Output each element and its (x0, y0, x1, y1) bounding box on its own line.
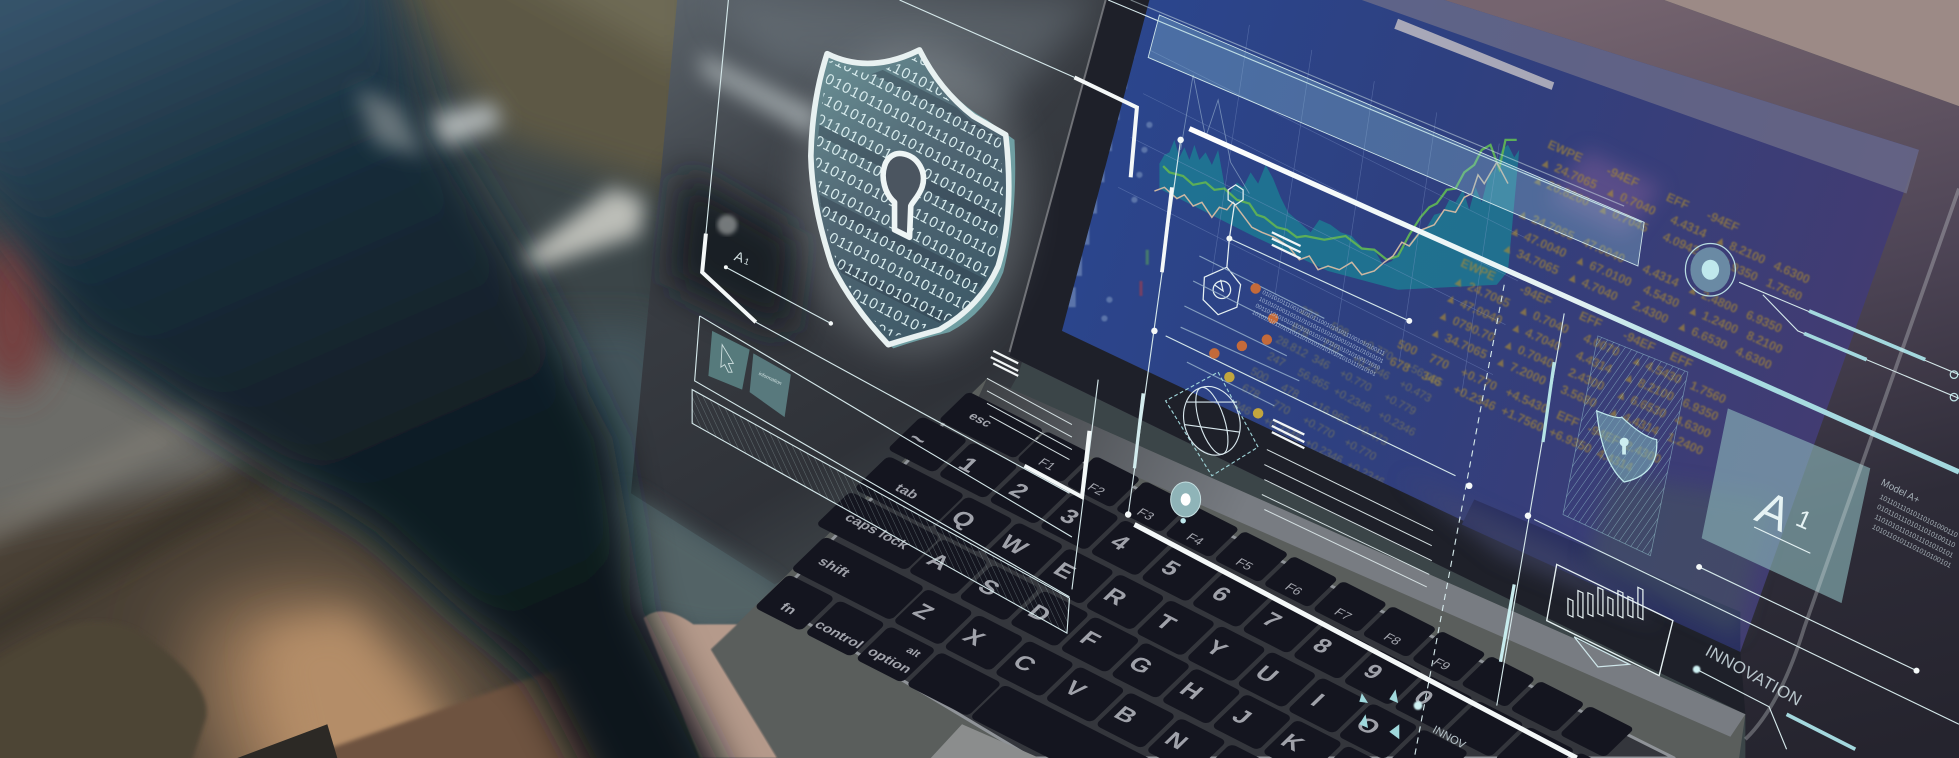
left stacked lines (987, 378, 1433, 587)
A1 card: A (1748, 481, 1800, 543)
market data columns: 678 346 +0.2346 +1.7560 +6.9350 4.4314 (1387, 354, 1635, 475)
keyboard lower letter row: shift (814, 555, 853, 580)
model label and binary readout (1871, 477, 1959, 570)
faded table numbers: 678 770 +0.2346 +0.473 (1289, 321, 1433, 405)
bar chart box (1547, 564, 1673, 676)
binary digits inside the shield: 1011010101010111010101011010110 (734, 205, 997, 350)
faded table numbers: 227 508 +0.770 +56.965 (1298, 304, 1445, 390)
faded table numbers: 28.812 346 +0.770 +0.779 (1274, 334, 1418, 418)
binary digits inside the shield: 1010101101010101011010101010100 (761, 151, 1028, 298)
binary digits inside the shield: 1010110101011010101010110101010 (743, 187, 1008, 334)
market data columns: ▲ 34.7065 ▲ 7.2000 3.5680 ▲ 4.4314 1.2400 (1428, 324, 1706, 458)
A1 card (1702, 408, 1870, 603)
A1 small label (732, 248, 751, 267)
market data columns: ▲ 24.7065 ▲ 0.7040 4.4314 ▲ 8.2100 4.6300 (1538, 154, 1812, 287)
keyboard function row: F8 (1380, 630, 1405, 648)
scanner node on keyboard edge (1171, 482, 1201, 523)
binary digits inside the shield (816, 58, 1003, 336)
hatched panel with small shield (1563, 336, 1688, 556)
blurred hardware highlights (356, 87, 645, 267)
keyboard number row: ~ (902, 427, 933, 452)
binary digits inside the shield: 1010101101010101101011010101010 (706, 258, 972, 405)
market data columns: 500 770 +0.770 +4.5430 EFF -94EF 2.4300 (1395, 337, 1663, 467)
keyboard function row: F6 (1282, 580, 1306, 598)
interface frame lines, thin (692, 0, 1959, 758)
model label and binary readout: 01011011101011010100110 (1876, 504, 1956, 549)
translucent holographic panel (537, 0, 1131, 631)
security shield icon (808, 47, 1016, 348)
keyboard well (772, 402, 1674, 758)
binary digits inside the shield: 1011010101010101101110101010100 (833, 9, 1098, 155)
keyboard lower letter row (791, 536, 1328, 758)
scanner node on upper right (1685, 244, 1735, 296)
glow around the shield (797, 44, 1027, 356)
keyboard number row: 3 (1054, 505, 1085, 529)
laptop lid (1009, 0, 1959, 758)
keyboard number row: 1 (953, 453, 984, 477)
market data columns: ▲ 34.7065 ▲ 4.7040 2.4300 ▲ 6.6530 4.6300 (1500, 240, 1774, 372)
keyboard lower letter row: X (957, 625, 990, 650)
keyboard bottom modifier row (754, 574, 1275, 758)
market data columns: EWPE -94EF EFF -94EF EFF (1459, 256, 1695, 371)
keyboard bottom modifier row: alt (903, 645, 924, 660)
A1 card: 1 (1792, 504, 1816, 536)
faded table numbers (1232, 306, 1444, 483)
hand holding the laptop (643, 611, 777, 758)
faded table numbers: 346 +0.2346 +0.2346 +0.2346 (1231, 399, 1386, 489)
keyboard lower letter row: V (1058, 677, 1092, 702)
keyboard function row: esc (965, 409, 996, 429)
keyboard lower letter row: Z (907, 599, 939, 624)
keyboard home row: K (1275, 730, 1310, 756)
binary data stream under the chart: 01010101110010101011100101010111001010100111 (1261, 290, 1386, 357)
binary data stream under the chart: 10101010011010101010110101010010101101010101 (1258, 297, 1384, 365)
keyboard number row: 7 (1256, 608, 1287, 632)
keyboard lower letter row: C (1007, 650, 1042, 677)
keyboard home row: G (1123, 652, 1158, 679)
keyboard QWERTY row: U (1249, 661, 1284, 688)
trackpad (931, 724, 1039, 758)
teal tile with information text (750, 353, 791, 417)
keyboard home row: H (1174, 678, 1208, 704)
keyboard home row (816, 491, 1394, 758)
model label and binary readout: 10110111010110101000110 (1878, 494, 1959, 539)
screen reflection outline on the right (1745, 189, 1959, 739)
binary digits inside the shield: 1101011010101011101010101101010 (697, 276, 961, 422)
keyhole (883, 153, 923, 237)
keyboard number row: 6 (1206, 582, 1237, 607)
keyboard lower letter row: N (1159, 728, 1193, 754)
model label and binary readout: 11010101101011101010101 (1873, 514, 1954, 560)
keyboard function row: F2 (1084, 481, 1109, 498)
keyboard function row: F7 (1331, 605, 1355, 623)
stock chart (1154, 75, 1519, 290)
model label and binary readout: Model A+ (1879, 477, 1921, 506)
keyboard number row: 8 (1307, 634, 1338, 658)
keyboard home row: F (1074, 627, 1106, 652)
market data columns: EWPE -94EF EFF -94EF (1545, 137, 1742, 235)
faded table numbers: 247 56.965 +0.2346 +0.2346 (1265, 350, 1417, 439)
keyboard number row: 2 (1003, 479, 1034, 503)
keyboard function row: F4 (1183, 531, 1207, 548)
keyboard bottom modifier row: control (811, 618, 866, 652)
arm and watch strap (237, 649, 700, 758)
keyboard function row: F1 (1035, 456, 1059, 473)
market data columns: ▲ 20.8200 ▲ 0.7045 4.0942 ▲ 6.9350 1.7560 (1530, 172, 1805, 304)
keyboard function row: F3 (1134, 506, 1158, 523)
INNOVATION label: INNOVATION (1702, 641, 1805, 710)
screen grid lines (1118, 25, 1524, 393)
faded table numbers: 678 770 +0.770 +0.770 (1240, 382, 1378, 463)
screen side tabs and stock ticks (1068, 37, 1153, 322)
market data columns: ▲ 47.0040 ▲ 67.0100 4.5430 ▲ 1.2400 8.2100 (1507, 223, 1785, 357)
market data columns (1390, 140, 1810, 471)
binary digits inside the shield: 1011010101101010101101010101000 (797, 80, 1063, 227)
keyboard QWERTY row (854, 456, 1469, 758)
binary digits inside the shield: 1101010110101011101010110101010 (806, 62, 1070, 208)
keyboard number row: 4 (1104, 531, 1136, 555)
keyboard bottom modifier row: fn (776, 601, 800, 618)
small triple bars (991, 232, 1304, 448)
teal tile with cursor icon (708, 331, 750, 390)
binary digits inside the shield: 1010101101010101011010101100101 (815, 45, 1081, 191)
keyboard QWERTY row: R (1098, 584, 1132, 610)
globe icon in dashed diamond (1166, 372, 1258, 476)
keyboard QWERTY row: W (994, 531, 1034, 560)
keyboard home row: caps lock (841, 511, 912, 552)
market data columns: ▲ 0790.70 ▲ 0.7040 2.4300 ▲ 6.6530 4.6300 (1436, 307, 1713, 441)
binary digits inside the shield: 1101010101101010101110101010100 (779, 116, 1044, 262)
A1 small label: 1 (743, 256, 751, 267)
laptop screen (1062, 0, 1919, 652)
keyboard bottom modifier row: option (864, 645, 915, 676)
market data columns: ▲ 47.0040 ▲ 4.7040 4.4314 ▲ 8.2100 6.9350 (1443, 290, 1721, 424)
binary digits inside the shield: 1011101010101010111010101101010 (770, 134, 1034, 279)
blurred shoulder in the foreground (0, 0, 743, 758)
faded table numbers: 500 478 +16.965 +0.473 (1248, 366, 1390, 448)
keyboard home row: A (921, 549, 955, 575)
keyboard number row (887, 416, 1626, 758)
small INNOVATION label on keyboard: INNOV (1430, 724, 1468, 752)
thick bracket and accent lines (702, 77, 1959, 758)
binary digits inside the shield: 1010110101010111010101011010100 (788, 98, 1053, 244)
chart marker hexagons (1203, 185, 1243, 315)
keyboard function row (938, 391, 1635, 758)
keyboard home row: S (972, 575, 1005, 600)
A1 small label: A (732, 248, 747, 266)
keyboard QWERTY row: Y (1199, 636, 1233, 661)
keyboard number row: 9 (1357, 660, 1388, 684)
keyboard home row: D (1022, 600, 1057, 627)
glowing nodes (1359, 666, 1700, 739)
slider controls with orange knobs (1181, 256, 1343, 419)
model label and binary readout: 10101101011101010100101 (1871, 524, 1952, 570)
binary data stream under the chart: 00110101010101101010101010110101010100101010 (1254, 303, 1381, 372)
keyboard QWERTY row: T (1149, 610, 1182, 635)
keyboard QWERTY row: E (1048, 558, 1081, 584)
line end dots (724, 137, 1920, 674)
keyboard function row: F5 (1232, 556, 1257, 573)
binary data stream under the chart: 10101010110101011101010101010101010111010101 (1251, 310, 1377, 378)
teal tile with information text: information (758, 371, 783, 387)
binary digits inside the shield: 1010101011101010101101010101011 (724, 223, 989, 369)
keyboard QWERTY row: Q (945, 506, 981, 533)
keyboard home row: J (1226, 705, 1257, 729)
keyboard QWERTY row: I (1305, 690, 1330, 711)
binary digits inside the shield: 1011010101010110101010111010101 (715, 240, 980, 386)
market data columns: ▲ 24.7065 47.0040 4.4314 ▲ 2.4800 6.9350 (1515, 206, 1784, 336)
top translucent data bar (1148, 15, 1644, 266)
keyboard QWERTY row: O (1350, 713, 1386, 740)
keyboard number row: 0 (1408, 686, 1439, 710)
keyboard QWERTY row: tab (891, 481, 922, 502)
binary digits inside the shield: 1101010101010110101011101010101 (752, 169, 1017, 315)
keyboard lower letter row: B (1108, 702, 1143, 728)
keyboard function row: F9 (1430, 655, 1454, 673)
laptop base (711, 378, 1745, 758)
keyboard number row: 5 (1155, 556, 1186, 581)
binary digits inside the shield: 1011010110101011101010101010101 (824, 27, 1089, 173)
market data columns: ▲ 24.7065 ▲ 0.7040 4.0070 ▲ 4.5430 1.7560 (1451, 273, 1728, 407)
